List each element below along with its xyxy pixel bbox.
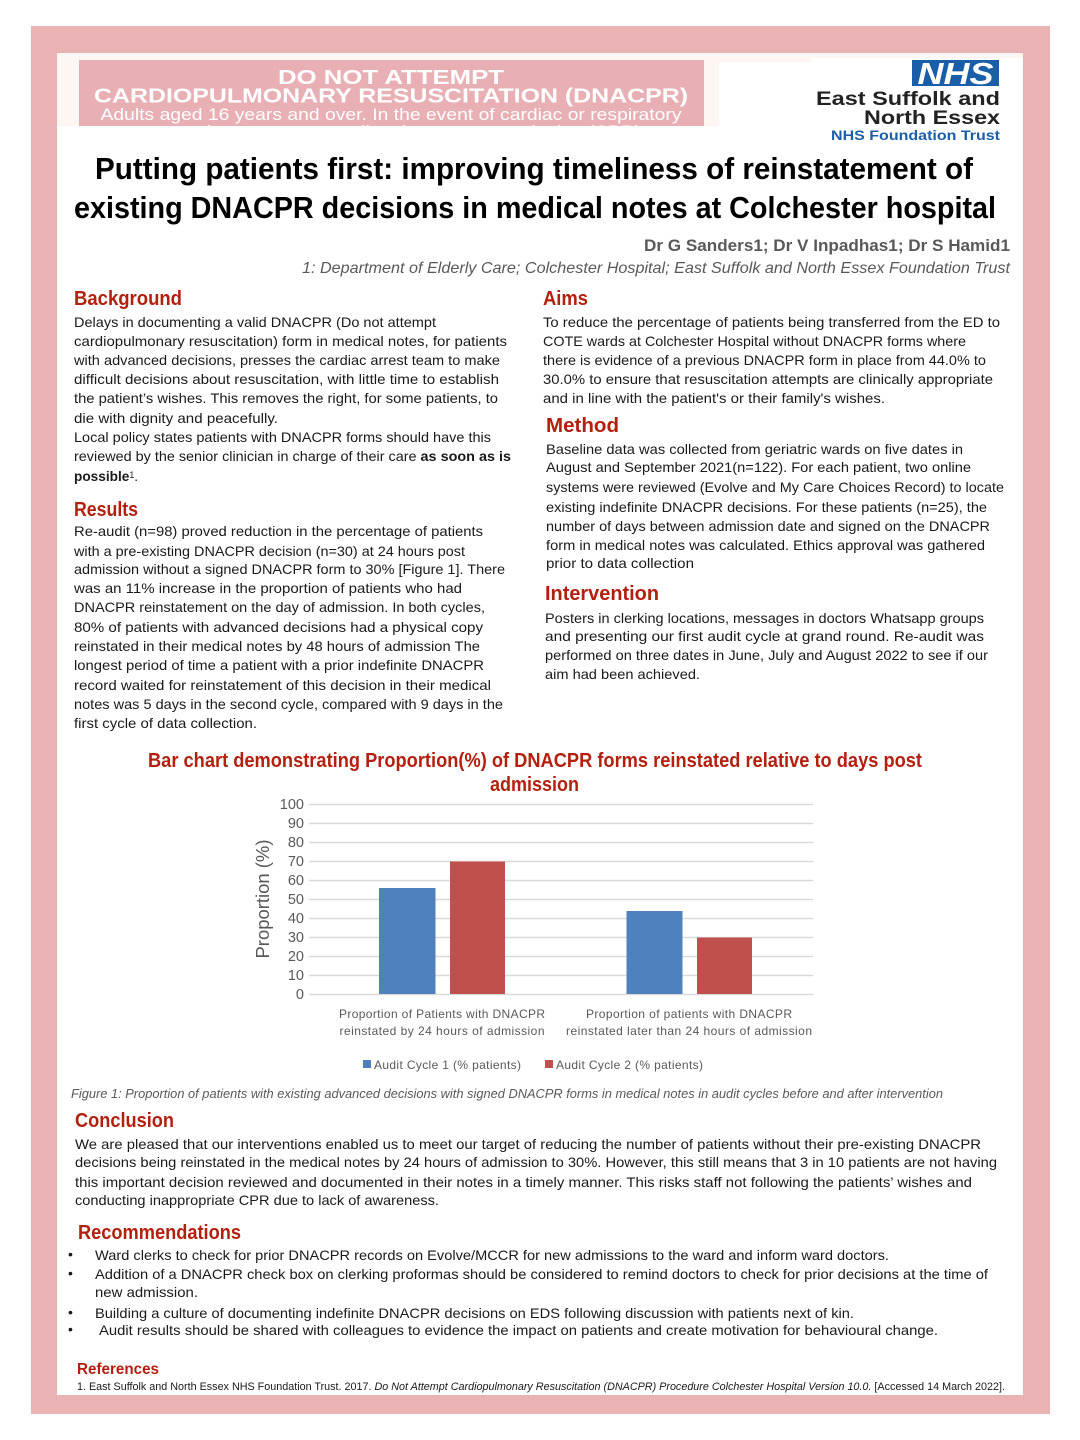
text: method body: prior to data collection [546,555,694,571]
authors: Dr G Sanders1; Dr V Inpadhas1; Dr S Hamid1 [644,237,1010,255]
text: intervention body: aim had been achieved. [545,666,700,682]
bar chart [253,797,813,1072]
chart title: Bar chart demonstrating Proportion(%) of DNACPR forms reinstated relative to days post [148,750,922,772]
heading: method: Method [546,415,619,437]
text: conclusion body: We are pleased that our interventions enabled us to meet our target of reducing the number of patients without their pre-existing DNACPR [75,1136,981,1152]
text: results body: record waited for reinstatement of this decision in their medical [74,677,491,693]
list: recommendations: • [68,1246,73,1262]
heading: intervention: Intervention [545,583,659,605]
y axis labels: 60 [288,873,304,889]
text: aims body: there is evidence of a previous DNACPR form in place from 44.0% to [543,352,986,368]
legend [363,1058,703,1072]
panel: method [546,415,1004,571]
text: results body: reinstated in their medical notes by 48 hours of admission The [74,638,480,654]
chart title: admission [490,774,579,796]
heading: aims: Aims [543,288,588,310]
text: intervention body [545,610,988,682]
banner: DNACPR form header: DO NOT ATTEMPT [278,66,505,89]
text: conclusion body [75,1136,997,1208]
text: results body: longest period of time a patient with a prior indefinite DNACPR [74,657,484,673]
text: background body: . [134,468,138,484]
heading: recommendations: Recommendations [78,1222,241,1244]
list: recommendations: Audit results should be shared with colleagues to evidence the impact on patients and create motivation for behavioural change. [99,1322,938,1338]
y axis labels [280,797,304,1003]
y axis labels: 0 [296,987,304,1003]
text: conclusion body: conducting inappropriate CPR due to lack of awareness. [75,1192,439,1208]
text: results body: 80% of patients with advanced decisions had a physical copy [74,619,483,635]
heading: results: Results [74,499,138,521]
logo: NHS East Suffolk and North Essex: NHS Foundation Trust [831,127,1000,143]
text: reference entry: 1. East Suffolk and North Essex NHS Foundation Trust. 2017. Do Not Attempt Cardiopulmonary Resuscitation (DNACPR) Procedure Colchester Hospital Version 10.0. [Accessed 14 March 2022]. [77,1381,1005,1393]
text: aims body: 30.0% to ensure that resuscitation attempts are clinically appropriate [543,371,993,387]
text: method body: August and September 2021(n=122). For each patient, two online [546,459,971,475]
title: Putting patients first: improving timeliness of reinstatement of [95,151,974,186]
text: method body: existing indefinite DNACPR decisions. For these patients (n=25), the [546,499,987,515]
list: recommendations: • [68,1304,73,1320]
category labels: Proportion of patients with DNACPR [586,1007,792,1021]
list: recommendations: • [68,1321,73,1337]
list: recommendations [68,1246,988,1338]
category labels: reinstated later than 24 hours of admission [566,1024,812,1038]
text: method body: systems were reviewed (Evolve and My Care Choices Record) to locate [546,479,1004,495]
logo: NHS East Suffolk and North Essex: NHS [918,56,994,91]
logo: NHS East Suffolk and North Essex [816,56,1001,143]
y axis labels: 20 [288,949,304,965]
text: aims body: and in line with the patient's or their family's wishes. [543,390,885,406]
text: results body: was an 11% increase in the proportion of patients who had [73,580,462,596]
text: results body: admission without a signed DNACPR form to 30% [Figure 1]. There [74,561,505,577]
text: aims body [543,314,1000,406]
panel: aims [543,288,1000,406]
legend: Audit Cycle 1 (% patients) [374,1058,521,1072]
panel: references [77,1361,1005,1393]
category labels: Proportion of Patients with DNACPR [339,1007,545,1021]
title: existing DNACPR decisions in medical notes at Colchester hospital [74,190,996,225]
list: recommendations: Building a culture of documenting indefinite DNACPR decisions on EDS following discussion with patients next of kin. [95,1305,854,1321]
y axis labels: 50 [288,892,304,908]
text: background body: possible [74,468,130,484]
banner: DNACPR form header: arrest, do not attempt cardiopulmonary resuscitation (CPR) [141,123,641,141]
text: results body: notes was 5 days in the second cycle, compared with 9 days in the [74,696,503,712]
text: background body: reviewed by the senior clinician in charge of their care as soon as is [74,448,511,464]
heading: background: Background [74,288,182,310]
text: background body: cardiopulmonary resuscitation) form in medical notes, for patients [74,333,507,349]
text: method body: Baseline data was collected from geriatric wards on five dates in [546,441,963,457]
y axis labels: 70 [288,854,304,870]
text: background body: Delays in documenting a valid DNACPR (Do not attempt [74,314,436,330]
text: results body: DNACPR reinstatement on the day of admission. In both cycles, [74,599,485,615]
text: background body: die with dignity and peacefully. [74,410,278,426]
panel: intervention [545,583,988,682]
text: background body: 1 [129,470,134,480]
logo: NHS East Suffolk and North Essex: East Suffolk and [816,89,1000,110]
text: background body: the patient’s wishes. This removes the right, for some patients, to [74,390,498,406]
text: intervention body: Posters in clerking locations, messages in doctors Whatsapp groups [545,610,984,626]
heading: conclusion: Conclusion [75,1110,174,1132]
category labels: reinstated by 24 hours of admission [340,1024,544,1038]
y axis labels: 100 [280,797,304,813]
text: background body: Local policy states patients with DNACPR forms should have this [74,429,491,445]
y axis title: Proportion (%) [253,839,273,959]
text: aims body: COTE wards at Colchester Hospital without DNACPR forms where [543,333,966,349]
title [74,151,996,225]
panel: conclusion [75,1110,997,1208]
list: recommendations: new admission. [95,1284,198,1300]
banner: DNACPR form header: CARDIOPULMONARY RESUSCITATION (DNACPR) [94,84,688,108]
text: intervention body: performed on three dates in June, July and August 2022 to see if our [545,647,988,663]
y axis labels: 80 [288,835,304,851]
text: results body: with a pre-existing DNACPR decision (n=30) at 24 hours post [73,543,465,559]
affiliation: 1: Department of Elderly Care; Colchester Hospital; East Suffolk and North Essex Foundation Trust [302,260,1011,277]
banner: DNACPR form header [79,60,704,126]
text: results body: first cycle of data collection. [74,715,257,731]
banner: DNACPR form header: Adults aged 16 years and over. In the event of cardiac or respiratory [100,106,682,124]
panel: recommendations [68,1222,988,1338]
panel: background [73,288,511,484]
text: method body [546,441,1004,571]
text: conclusion body: decisions being reinstated in the medical notes by 24 hours of admission to 30%. However, this still means that 3 in 10 patients are not having [75,1154,997,1170]
text: background body: difficult decisions about resuscitation, with little time to establish [74,371,499,387]
text: conclusion body: this important decision reviewed and documented in their notes in a timely manner. This risks staff not following the patients’ wishes and [75,1174,972,1190]
y axis labels: 10 [288,968,304,984]
list: recommendations: Addition of a DNACPR check box on clerking proformas should be considered to remind doctors to check for prior decisions at the time of [95,1266,988,1282]
list: recommendations: • [68,1265,73,1281]
figure caption: Figure 1: Proportion of patients with existing advanced decisions with signed DNACPR forms in medical notes in audit cycles before and after intervention [71,1086,943,1101]
text: background body [73,314,511,484]
y axis labels: 40 [288,911,304,927]
chart title [148,750,922,796]
list: recommendations: Ward clerks to check for prior DNACPR records on Evolve/MCCR for new admissions to the ward and inform ward doctors. [95,1247,889,1263]
text: results body [73,523,505,731]
text: method body: form in medical notes was calculated. Ethics approval was gathered [546,537,985,553]
logo: NHS East Suffolk and North Essex: North Essex [864,108,1001,129]
y axis labels: 30 [288,930,304,946]
bars [379,862,752,994]
category labels [339,1007,812,1038]
panel: results [73,499,505,731]
text: aims body: To reduce the percentage of patients being transferred from the ED to [543,314,1000,330]
text: results body: Re-audit (n=98) proved reduction in the percentage of patients [74,523,483,539]
text: background body: with advanced decisions, presses the cardiac arrest team to make [73,352,500,368]
text: intervention body: and presenting our first audit cycle at grand round. Re-audit was [545,628,984,644]
heading: references: References [77,1361,159,1378]
text: method body: number of days between admission date and signed on the DNACPR [546,518,990,534]
gridlines [309,804,813,994]
y axis labels: 90 [288,816,304,832]
legend: Audit Cycle 2 (% patients) [556,1058,703,1072]
